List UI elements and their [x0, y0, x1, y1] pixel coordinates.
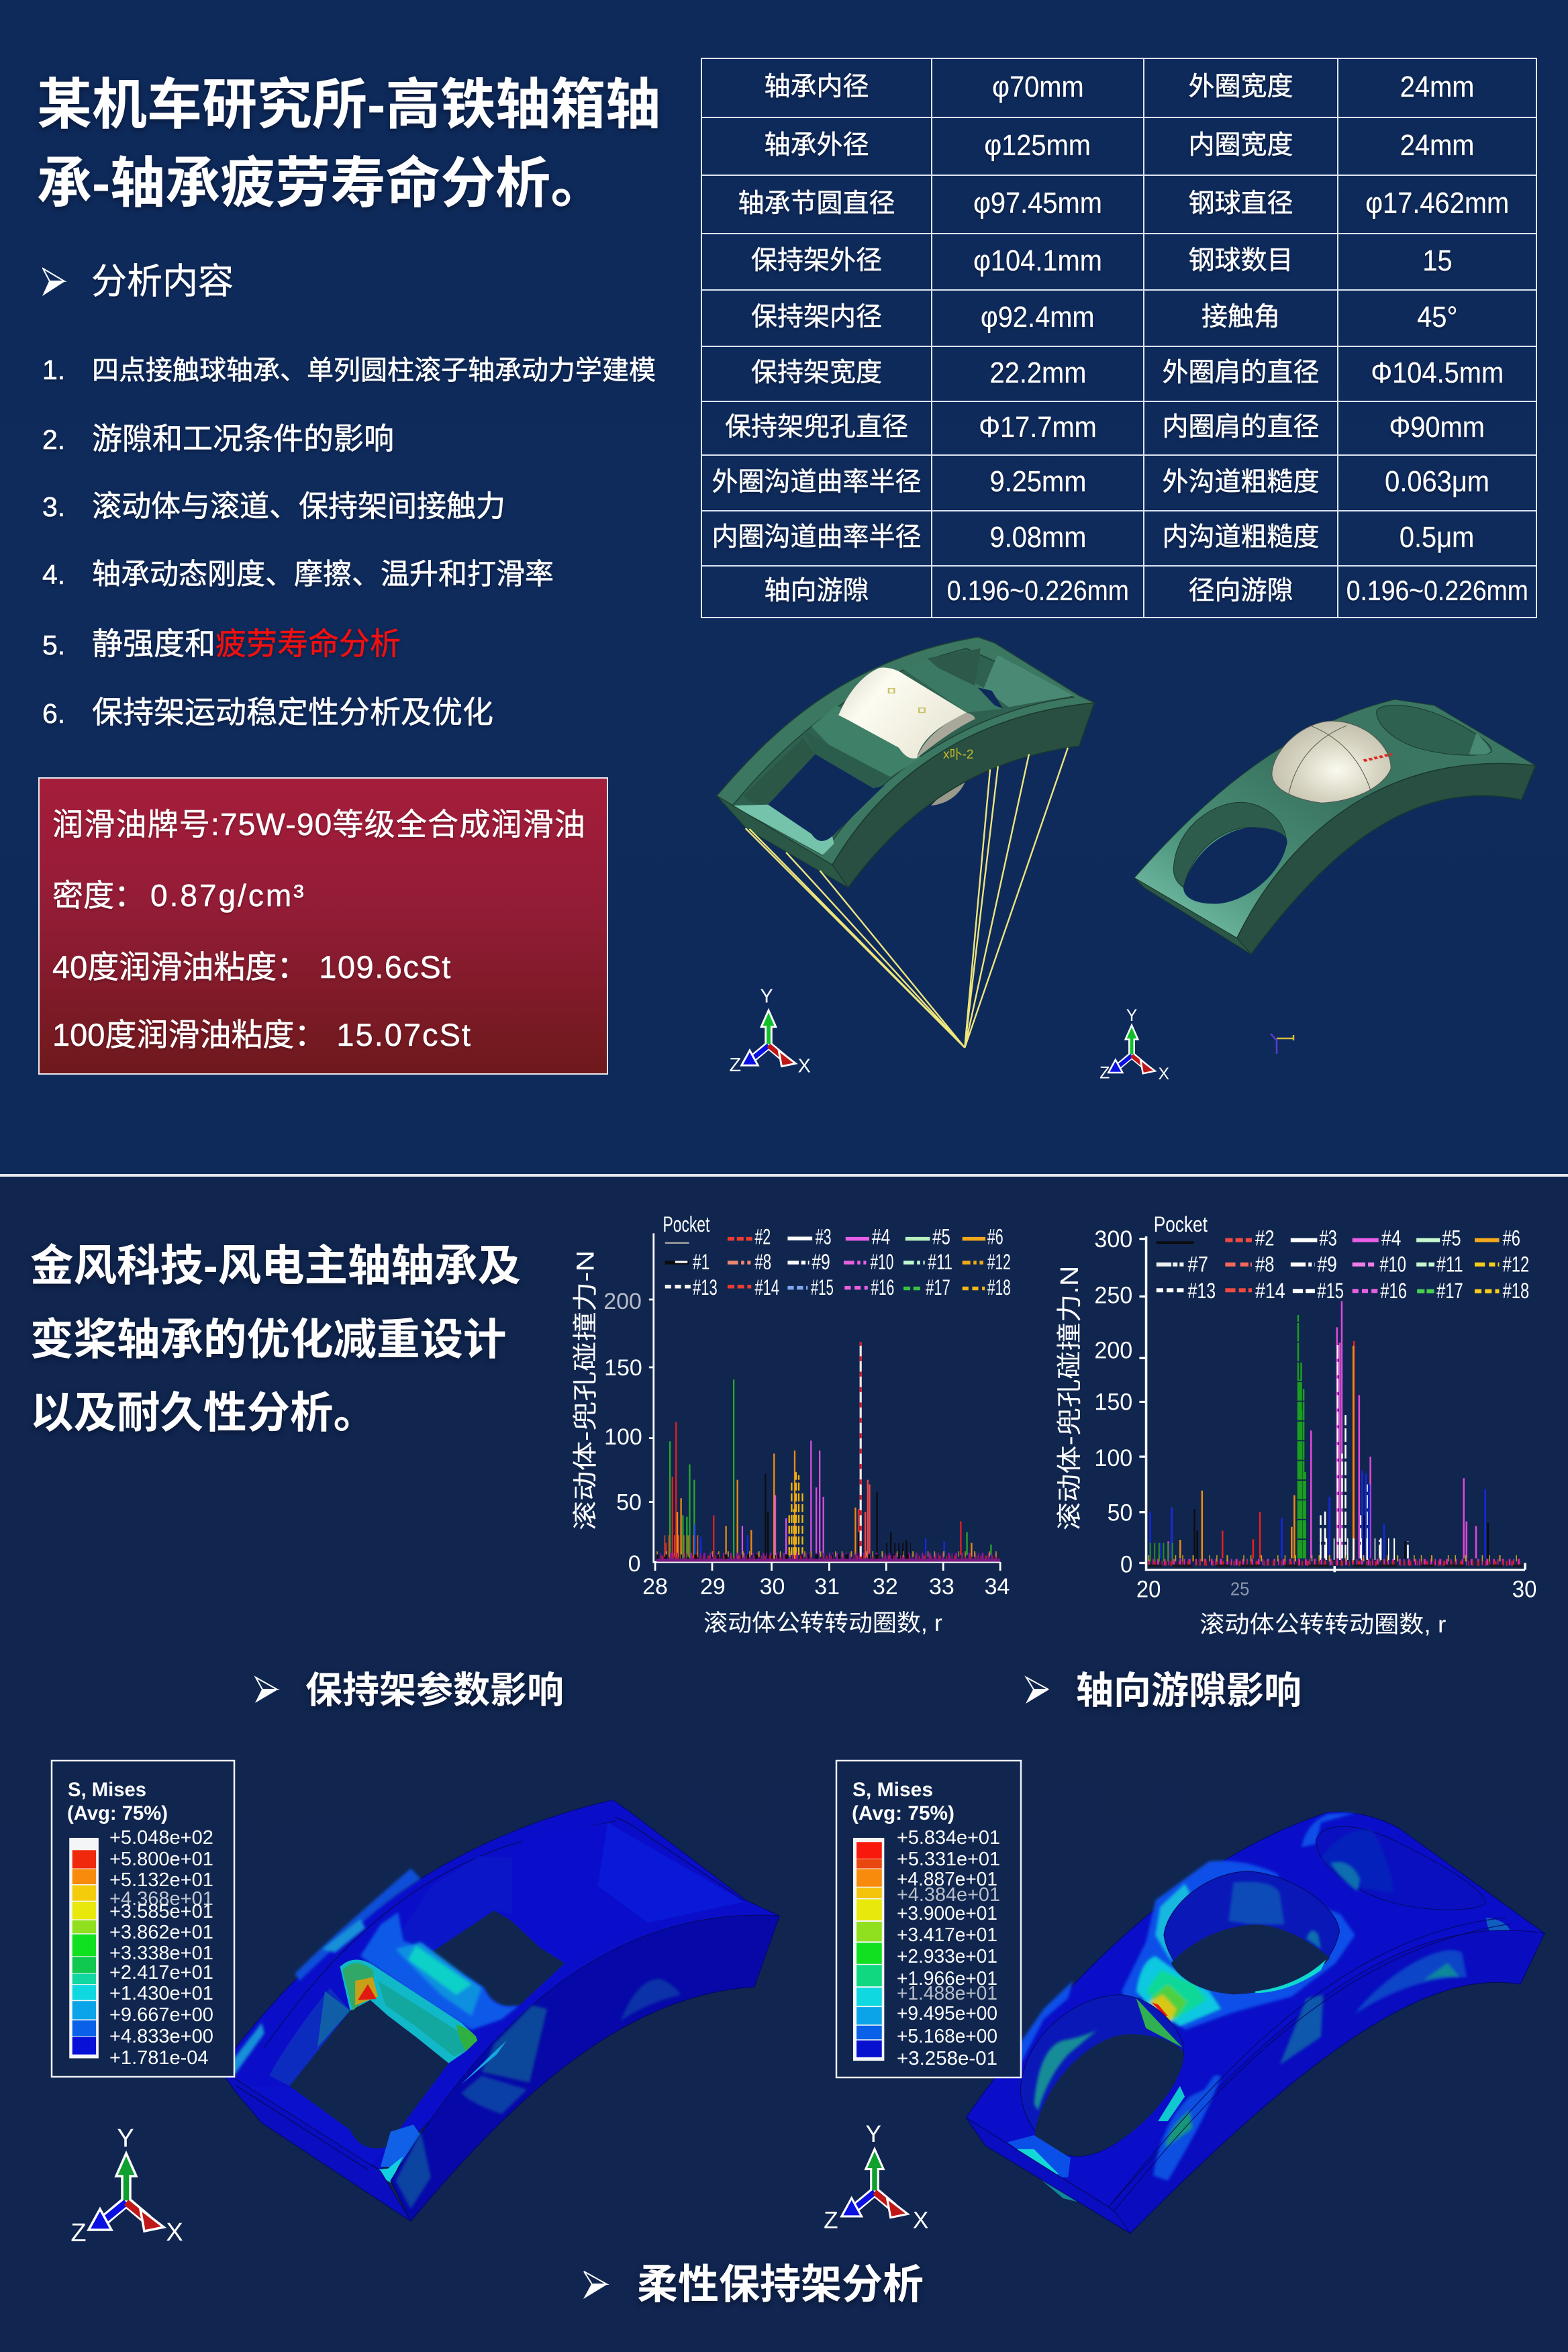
heading: flexible cage analysis: 柔性保持架分析	[637, 2261, 924, 2307]
chart 1 legend: #2	[754, 1224, 771, 1248]
legend: S Mises stress scale 1: +1.781e-04	[109, 2047, 209, 2069]
axis triad 3: X	[166, 2218, 183, 2247]
table: bearing parameters: 轴承外径	[764, 131, 869, 160]
list item 5: 静强度和疲劳寿命分析	[92, 626, 401, 661]
chart 2 legend: #18	[1503, 1279, 1529, 1303]
legend: S Mises stress scale 1: +5.048e+02	[109, 1827, 213, 1849]
chart 1 legend: #9	[812, 1250, 830, 1274]
legend: S Mises stress scale 2: S, Mises	[852, 1779, 933, 1801]
axis triad 3	[70, 2124, 183, 2247]
legend: S Mises stress scale 1: +4.833e+00	[109, 2026, 213, 2047]
table: bearing parameters: φ97.45mm	[973, 187, 1102, 219]
table: bearing parameters: 9.08mm	[989, 521, 1086, 553]
chart: cage parameter influence: 31	[814, 1574, 840, 1600]
chart: axial clearance influence: 滚动体-兜孔碰撞力.N	[1055, 1266, 1083, 1530]
legend: S Mises stress scale 2: +5.834e+01	[897, 1827, 1000, 1849]
chart 2 legend: #10	[1379, 1253, 1406, 1277]
panel: lubricant parameters: 40度润滑油粘度： 109.6cSt	[52, 949, 452, 985]
table: bearing parameters: 24mm	[1400, 129, 1474, 161]
list item 6: 保持架运动稳定性分析及优化	[92, 695, 493, 730]
chart: cage parameter influence: 28	[642, 1574, 668, 1600]
table: bearing parameters: φ92.4mm	[981, 301, 1095, 333]
chart: cage parameter influence: 100	[604, 1424, 642, 1450]
axis triad 1: Z	[730, 1055, 741, 1076]
model: roller cage with springs	[717, 637, 1094, 1048]
chart: axial clearance influence: 25	[1230, 1579, 1249, 1600]
table: bearing parameters: 22.2mm	[989, 356, 1086, 389]
legend: S Mises stress scale 1: +4.368e+01	[109, 1888, 213, 1910]
chart: cage parameter influence: 50	[616, 1490, 642, 1516]
chart: cage parameter influence: 32	[873, 1574, 898, 1600]
list item 4: 轴承动态刚度、摩擦、温升和打滑率	[92, 558, 554, 591]
panel: lubricant parameters: 100度润滑油粘度： 15.07cSt	[52, 1017, 472, 1052]
heading: axial clearance influence: 轴向游隙影响	[1076, 1669, 1302, 1712]
heading: cage parameter influence: 保持架参数影响	[305, 1669, 564, 1711]
legend: S Mises stress scale 1: +5.800e+01	[109, 1849, 213, 1870]
arrow: cage parameter heading	[255, 1677, 278, 1703]
list item 4: 4.	[42, 559, 65, 590]
axis triad 2: Z	[1099, 1065, 1110, 1083]
arrow: flexible cage heading	[583, 2271, 607, 2299]
chart 1 legend: #12	[987, 1250, 1011, 1274]
title: wind turbine bearing optimisation: 变桨轴承的优化减重设计	[30, 1316, 507, 1364]
axis triad 3: Z	[70, 2219, 87, 2247]
table: bearing parameters: 0.196~0.226mm	[946, 575, 1129, 606]
chart 2 legend: #16	[1380, 1279, 1407, 1303]
table: bearing parameters: 9.25mm	[989, 465, 1086, 498]
chart: cage parameter influence: 150	[604, 1355, 642, 1381]
list item 6: 6.	[42, 698, 65, 729]
chart 2 legend: Pocket	[1154, 1213, 1208, 1237]
legend: S Mises stress scale 1: +1.430e+01	[109, 1983, 213, 2004]
table: bearing parameters: 0.196~0.226mm	[1346, 575, 1528, 606]
legend: S Mises stress scale 2: +1.488e+01	[897, 1983, 997, 2004]
legend: S Mises stress scale 1: +5.132e+01	[109, 1869, 213, 1891]
table: bearing parameters: 轴向游隙	[764, 576, 869, 605]
table: bearing parameters: 内圈肩的直径	[1162, 413, 1320, 442]
chart: axial clearance influence: 250	[1094, 1282, 1132, 1308]
legend: S Mises stress scale 2: +3.417e+01	[897, 1924, 997, 1946]
chart 2 legend: #2	[1255, 1226, 1274, 1251]
chart 2 legend: #7	[1187, 1253, 1208, 1277]
chart 1 legend: #16	[871, 1275, 894, 1300]
panel: lubricant parameters	[38, 777, 608, 1075]
legend: S Mises stress scale 1: +3.585e+01	[109, 1901, 213, 1922]
table: bearing parameters: 内圈沟道曲率半径	[712, 523, 921, 552]
table: bearing parameters: 外沟道粗糙度	[1162, 467, 1320, 497]
analysis content list	[42, 354, 656, 730]
chart 1 legend	[663, 1212, 1011, 1300]
chart: axial clearance influence: 0	[1120, 1551, 1132, 1577]
table: bearing parameters: 45°	[1417, 301, 1457, 333]
title: wind turbine bearing optimisation: 金风科技-风电主轴轴承及	[30, 1242, 521, 1290]
legend: S Mises stress scale 1: +2.417e+01	[109, 1962, 213, 1983]
list item 2: 2.	[42, 424, 65, 455]
chart 2 legend: #14	[1255, 1279, 1285, 1303]
chart 1 legend: #15	[811, 1275, 834, 1300]
axis triad 2: X	[1158, 1065, 1169, 1083]
chart: cage parameter influence: 200	[603, 1289, 642, 1314]
table: bearing parameters: φ125mm	[985, 129, 1091, 161]
chart 1 legend: #14	[754, 1275, 779, 1300]
table: bearing parameters: Φ104.5mm	[1371, 356, 1504, 389]
model: cage with ball	[1134, 699, 1536, 954]
table: bearing parameters: 0.063μm	[1385, 465, 1489, 498]
table: bearing parameters: 保持架宽度	[751, 358, 882, 387]
table: bearing parameters: 外圈宽度	[1188, 72, 1293, 101]
table: bearing parameters: 内沟道粗糙度	[1162, 523, 1320, 552]
chart: axial clearance influence: 200	[1094, 1337, 1132, 1363]
chart 2 legend: #4	[1381, 1226, 1401, 1251]
chart 2 legend: #3	[1319, 1226, 1337, 1251]
axis triad 1: Y	[761, 986, 773, 1008]
table: bearing parameters: 保持架外径	[751, 246, 882, 275]
legend: S Mises stress scale 2: +5.331e+01	[897, 1849, 1000, 1870]
list item 5: 5.	[42, 630, 65, 660]
chart: axial clearance influence: 50	[1108, 1500, 1132, 1526]
chart 1 legend: #1	[693, 1250, 709, 1274]
chart: axial clearance influence: 300	[1094, 1226, 1132, 1253]
chart 2 legend	[1154, 1213, 1529, 1303]
table: bearing parameters: 轴承节圆直径	[738, 189, 895, 217]
table: bearing parameters: 钢球直径	[1188, 189, 1293, 217]
panel: lubricant parameters: 润滑油牌号:75W-90等级全合成润滑油	[52, 807, 586, 842]
legend: S Mises stress scale 2: (Avg: 75%)	[852, 1802, 954, 1824]
chart: cage parameter influence: 滚动体公转转动圈数, r	[703, 1610, 942, 1636]
ball	[1272, 721, 1391, 803]
table: bearing parameters	[701, 58, 1537, 618]
legend: S Mises stress scale 2: +4.887e+01	[897, 1869, 997, 1890]
chart 1 legend: #13	[693, 1275, 718, 1300]
chart: axial clearance influence: 30	[1512, 1576, 1536, 1602]
list item 2: 游隙和工况条件的影响	[92, 422, 394, 456]
table: bearing parameters: Φ90mm	[1389, 411, 1485, 443]
table: bearing parameters: 保持架内径	[751, 303, 882, 332]
axis triad 2: Y	[1126, 1007, 1137, 1025]
legend: S Mises stress scale 2: +3.258e-01	[897, 2048, 997, 2069]
title: locomotive institute bearing analysis: 承-轴承疲劳寿命分析。	[37, 153, 605, 214]
axis triad 1	[730, 986, 811, 1077]
chart 1 legend: #17	[926, 1275, 950, 1300]
chart 2 legend: #15	[1317, 1279, 1344, 1303]
table: bearing parameters: 径向游隙	[1188, 576, 1293, 605]
model: stress contour ball cage	[966, 1812, 1545, 2233]
model: stress contour roller cage	[219, 1800, 779, 2221]
chart: cage parameter influence: 34	[985, 1574, 1010, 1600]
legend: S Mises stress scale 1: (Avg: 75%)	[67, 1802, 168, 1824]
legend: S Mises stress scale 2: +1.966e+01	[897, 1968, 997, 1990]
legend: S Mises stress scale 2: +9.495e+00	[897, 2003, 997, 2024]
chart: axial clearance influence: 滚动体公转转动圈数, r	[1199, 1611, 1446, 1637]
legend: S Mises stress scale 1: +3.338e+01	[109, 1943, 213, 1964]
list item 3: 滚动体与滚道、保持架间接触力	[92, 490, 505, 523]
legend: S Mises stress scale 1: S, Mises	[68, 1779, 146, 1801]
legend: S Mises stress scale 2: +2.933e+01	[897, 1946, 997, 1967]
label: spring tag: x卟-2	[943, 747, 973, 762]
table: bearing parameters: 轴承内径	[764, 72, 869, 101]
chart 2 legend: #13	[1187, 1279, 1216, 1303]
chart: axial clearance influence: 20	[1136, 1576, 1161, 1602]
chart 2 legend: #9	[1317, 1253, 1337, 1277]
chart 1 legend: #11	[928, 1250, 952, 1274]
legend: S Mises stress scale 1	[52, 1761, 234, 2077]
table: bearing parameters: φ17.462mm	[1365, 187, 1509, 219]
small reference triad	[1271, 1034, 1294, 1054]
table: bearing parameters: 保持架兜孔直径	[725, 413, 908, 442]
title: locomotive institute bearing analysis: 某机车研究所-高铁轴箱轴	[37, 75, 660, 136]
roller	[838, 668, 967, 758]
chart 1 legend: #5	[932, 1224, 950, 1248]
chart: cage parameter influence: 滚动体-兜孔碰撞力-N	[571, 1251, 599, 1530]
list item 1: 1.	[42, 354, 65, 385]
table: bearing parameters: 15	[1422, 244, 1452, 277]
axis triad 1: X	[798, 1055, 811, 1077]
table: bearing parameters: 24mm	[1400, 70, 1474, 103]
chart: axial clearance influence: 150	[1094, 1389, 1132, 1415]
title: wind turbine bearing optimisation	[30, 1242, 521, 1437]
chart: cage parameter influence: 30	[760, 1574, 785, 1600]
heading: analysis content: 分析内容	[91, 262, 234, 301]
chart: cage parameter influence: 29	[700, 1574, 726, 1600]
chart 2 legend: #5	[1442, 1226, 1461, 1251]
table: bearing parameters: 0.5μm	[1400, 521, 1475, 553]
table: bearing parameters: 外圈沟道曲率半径	[712, 467, 921, 497]
axis triad 4: Y	[865, 2121, 881, 2147]
chart 2 legend: #17	[1436, 1279, 1463, 1303]
legend: S Mises stress scale 2: +4.384e+01	[897, 1884, 1000, 1906]
chart 1 legend: #4	[872, 1224, 890, 1248]
divider	[0, 1174, 1568, 1177]
chart 2 legend: #12	[1503, 1253, 1529, 1277]
chart: cage parameter influence	[571, 1233, 1010, 1636]
table: bearing parameters: 接触角	[1202, 303, 1280, 332]
axis triad 4: Z	[824, 2208, 838, 2234]
legend: S Mises stress scale 2: +5.168e+00	[897, 2026, 997, 2047]
chart: axial clearance influence: 100	[1094, 1445, 1132, 1471]
stress hot spot	[1136, 1956, 1221, 2026]
panel: lubricant parameters: 密度：0.87g/cm³	[52, 878, 306, 913]
legend: S Mises stress scale 1: +3.862e+01	[109, 1922, 213, 1943]
chart: axial clearance influence	[1055, 1226, 1536, 1637]
title: wind turbine bearing optimisation: 以及耐久性分析。	[30, 1389, 377, 1437]
legend: S Mises stress scale 2	[836, 1761, 1021, 2077]
legend: S Mises stress scale 1: +9.667e+00	[109, 2004, 213, 2026]
list item 1: 四点接触球轴承、单列圆柱滚子轴承动力学建模	[92, 356, 656, 385]
table: bearing parameters: 钢球数目	[1188, 246, 1293, 275]
list item 3: 3.	[42, 491, 65, 522]
chart 1 legend: Pocket	[663, 1212, 709, 1236]
table: bearing parameters: 外圈肩的直径	[1162, 358, 1320, 387]
chart: cage parameter influence: 33	[929, 1574, 954, 1600]
legend: S Mises stress scale 2: +3.900e+01	[897, 1903, 997, 1924]
chart: cage parameter influence: 0	[628, 1551, 640, 1577]
table: bearing parameters: φ104.1mm	[973, 244, 1102, 277]
axis triad 2	[1099, 1007, 1169, 1083]
chart 1 legend: #6	[987, 1224, 1003, 1248]
chart 2 legend: #11	[1436, 1253, 1463, 1277]
chart 2 legend: #6	[1503, 1226, 1520, 1251]
chart 1 legend: #18	[987, 1275, 1011, 1300]
table: bearing parameters: φ70mm	[992, 70, 1083, 103]
axis triad 3: Y	[117, 2124, 134, 2153]
title: locomotive institute bearing analysis	[37, 75, 660, 214]
chart 1 legend: #10	[870, 1250, 893, 1274]
chart 1 legend: #8	[754, 1250, 771, 1274]
arrow: clearance heading	[1026, 1677, 1049, 1704]
axis triad 4: X	[913, 2208, 928, 2234]
chart 1 legend: #3	[816, 1224, 832, 1248]
table: bearing parameters: 内圈宽度	[1188, 131, 1293, 160]
table: bearing parameters: Φ17.7mm	[979, 411, 1097, 443]
axis triad 4	[824, 2121, 928, 2234]
chart 2 legend: #8	[1255, 1253, 1274, 1277]
